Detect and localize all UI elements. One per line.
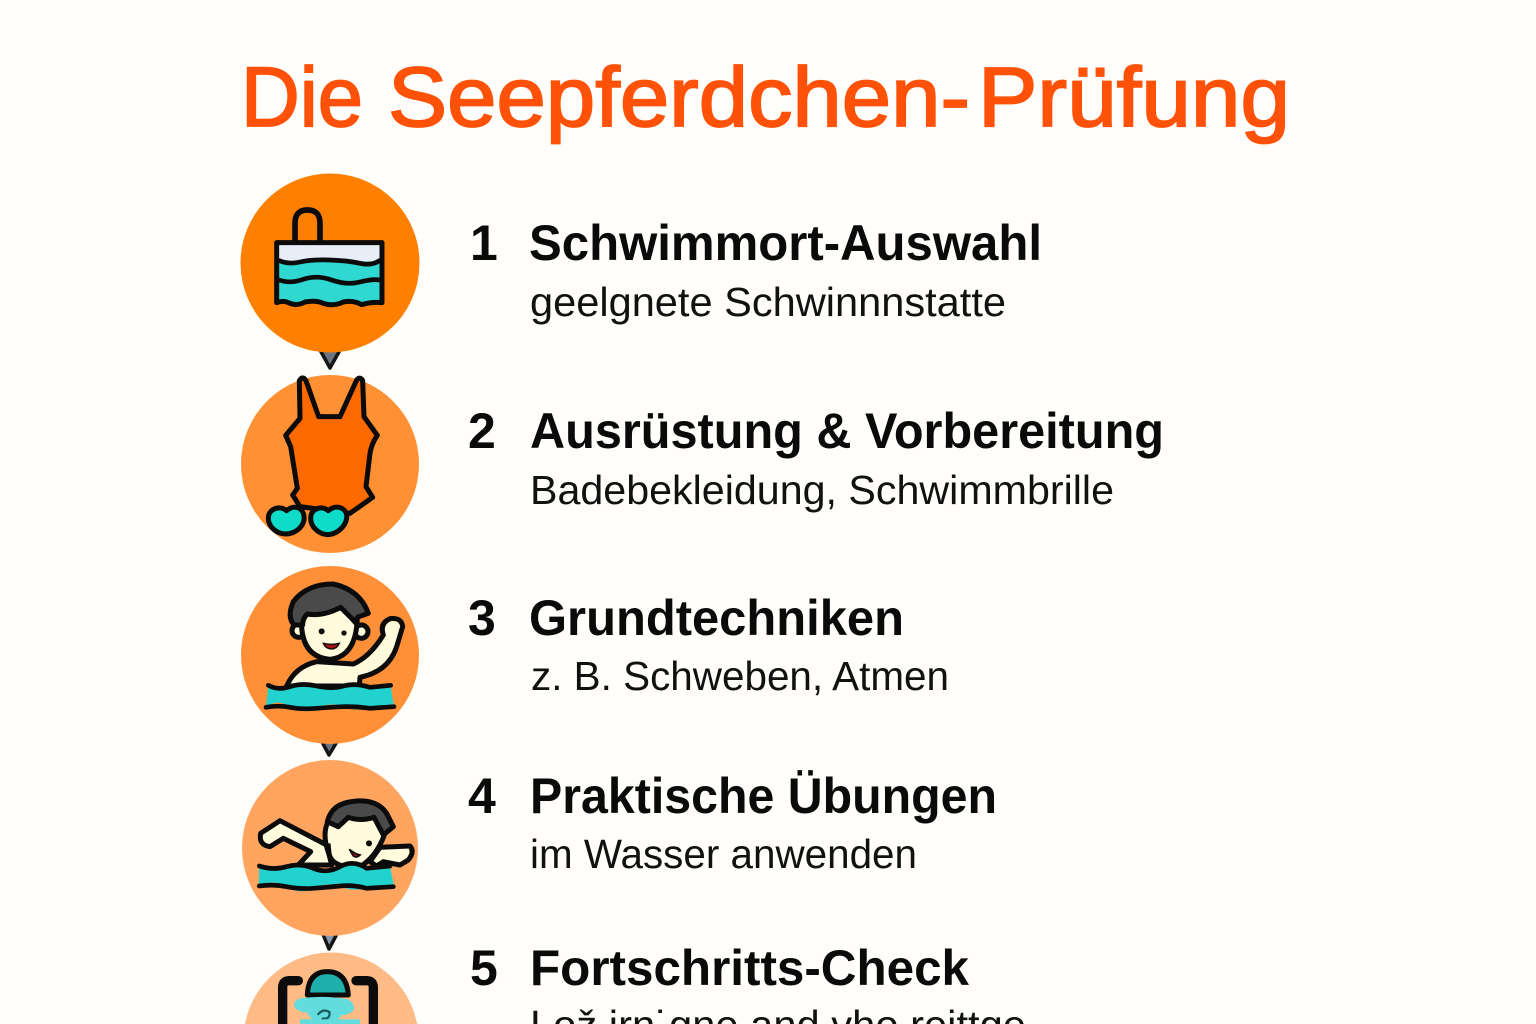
step 5 number: 5 [470,940,498,996]
step 3 number: 3 [468,590,496,646]
step 2 [468,403,1164,513]
step 1 number: 1 [470,215,498,271]
step 2 description: Badebekleidung, Schwimmbrille [530,467,1114,513]
step 1 [470,215,1042,325]
step 5 heading: Fortschritts-Check [530,940,969,996]
step 2 heading: Ausrüstung & Vorbereitung [530,403,1164,459]
icon: child waving in water [241,566,419,744]
icon: swimming pool [240,174,420,352]
step 4 heading: Praktische Übungen [530,768,997,824]
title: Prüfung [978,50,1290,144]
icon: swimsuit and goggles [241,375,419,553]
icon: progress checklist clipboard [244,952,418,1024]
step 5 [470,940,1026,1024]
step 1 description: geelgnete Schwinnnstatte [530,279,1006,325]
step 4 description: im Wasser anwenden [530,831,917,877]
title: Seepferdchen- [388,50,970,144]
step 3 description: z. B. Schweben, Atmen [531,653,949,699]
step 2 number: 2 [468,403,496,459]
step 3 heading: Grundtechniken [529,590,904,646]
arrow: step 4 to 5 [322,932,338,949]
step 4 [468,768,997,877]
arrow: step 1 to 2 [320,350,340,368]
step 3 [468,590,949,699]
title [241,50,1290,144]
step 4 number: 4 [468,768,496,824]
arrow: step 3 to 4 [321,740,338,755]
step 1 heading: Schwimmort-Auswahl [529,215,1042,271]
icon: swimmer [242,760,418,936]
title: Die [241,50,363,144]
